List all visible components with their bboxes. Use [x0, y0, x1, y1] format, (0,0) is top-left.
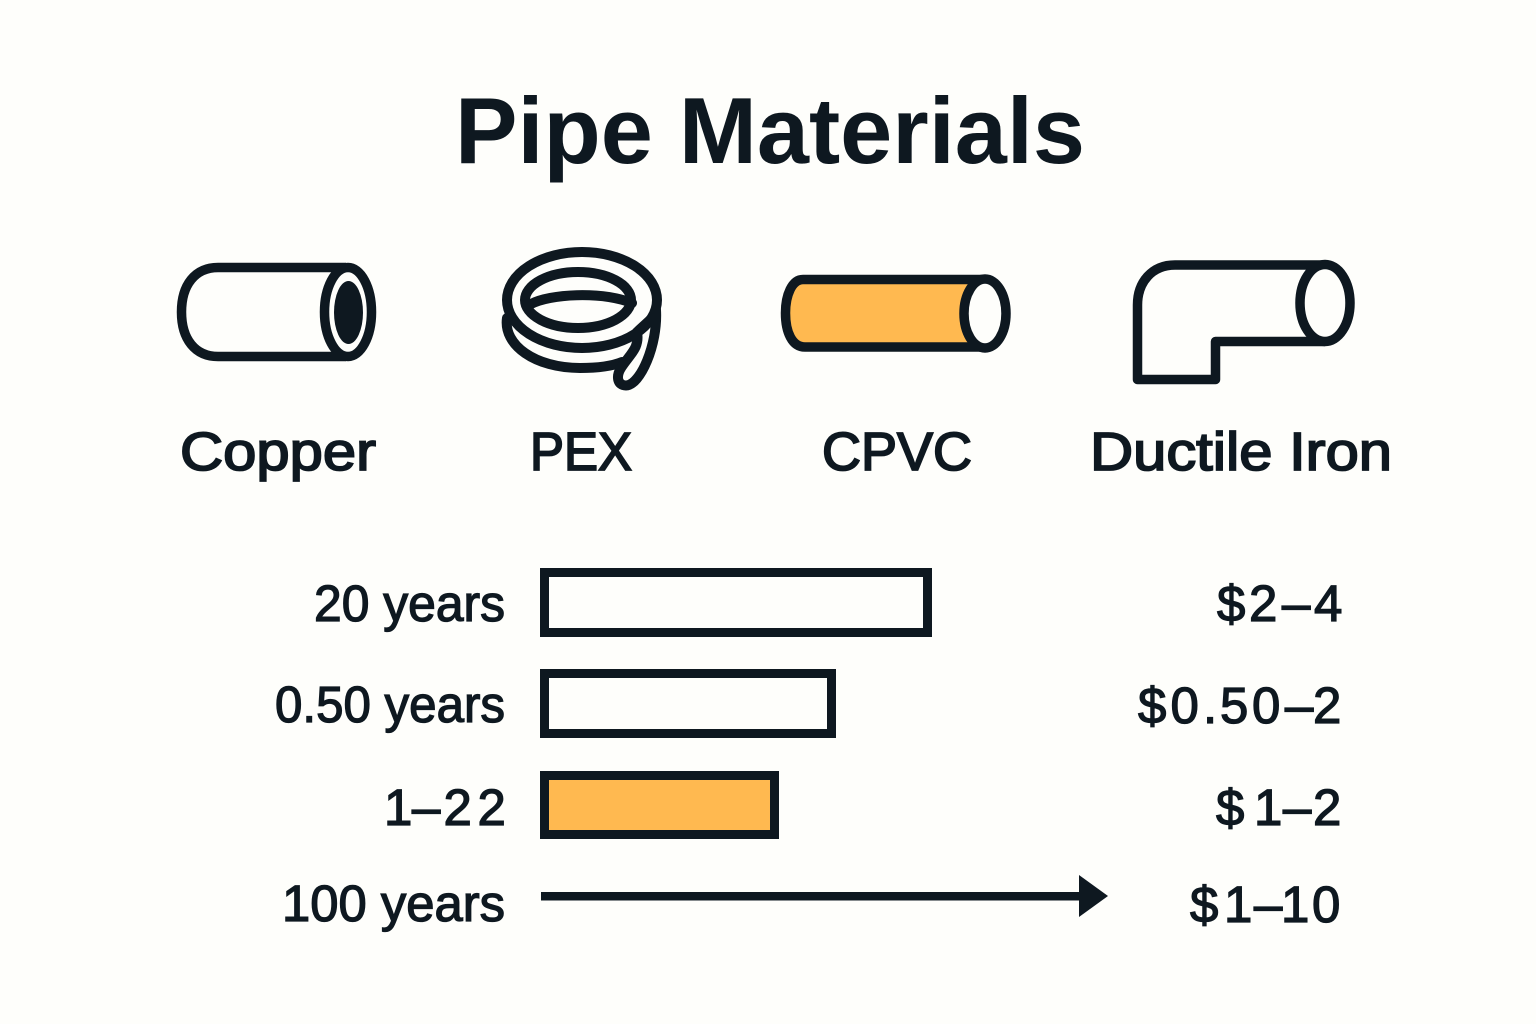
bar: PEX — [544, 674, 832, 734]
cost: $2–4: $2–4 — [1217, 575, 1342, 632]
label: Copper: Copper — [180, 422, 376, 482]
icon: ductile iron elbow — [1138, 264, 1350, 380]
icon: copper pipe — [182, 268, 372, 356]
label: CPVC: CPVC — [822, 422, 972, 482]
bar: copper — [544, 572, 928, 632]
lifespan: 100 years: 100 years — [282, 875, 505, 932]
icon: CPVC pipe — [786, 279, 1006, 348]
lifespan: 1–22: 1–22 — [384, 779, 506, 836]
arrow: ductile iron — [541, 875, 1108, 917]
cost: $1–10: $1–10 — [1190, 876, 1340, 933]
icon: PEX coil — [507, 252, 657, 386]
lifespan: 0.50 years: 0.50 years — [275, 676, 505, 733]
bar: CPVC — [544, 776, 774, 834]
title: Pipe Materials — [455, 78, 1085, 183]
label: PEX: PEX — [530, 422, 632, 482]
cost: $1–2: $1–2 — [1216, 779, 1341, 836]
cost: $0.50–2: $0.50–2 — [1138, 677, 1341, 734]
lifespan: 20 years: 20 years — [314, 575, 505, 632]
label: Ductile Iron: Ductile Iron — [1090, 422, 1392, 482]
